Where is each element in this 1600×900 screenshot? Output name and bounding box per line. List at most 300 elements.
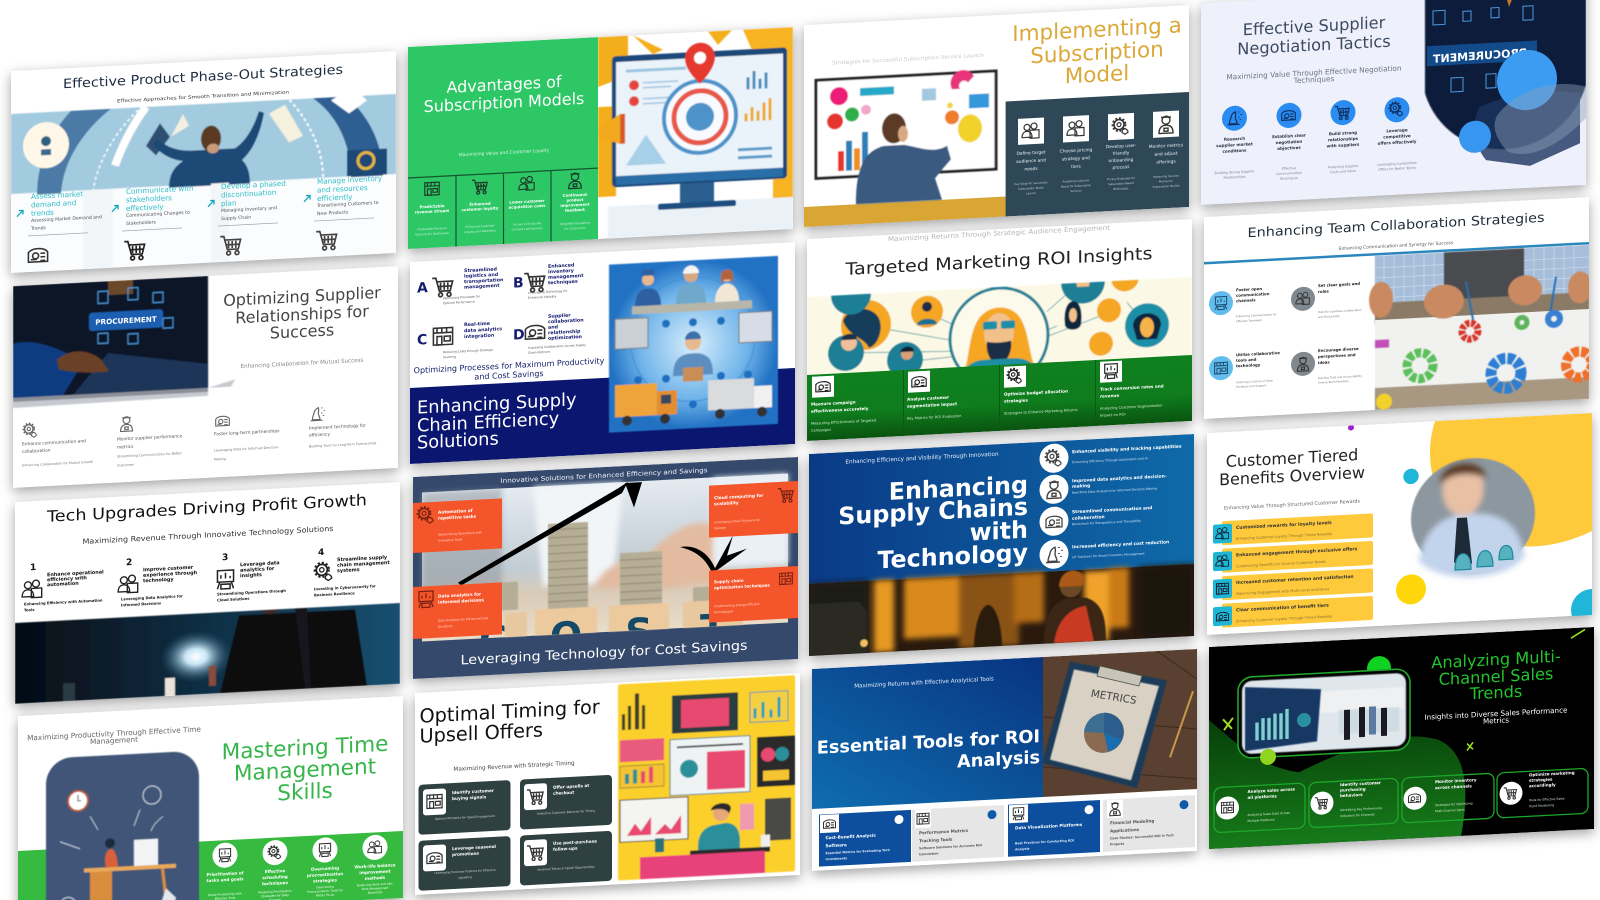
dot: lime bbox=[1260, 749, 1276, 765]
card: seasonal bbox=[418, 836, 510, 891]
tactic: leverage: competitive bbox=[1383, 133, 1411, 140]
card: follow-up: Use post-purchase bbox=[553, 839, 597, 846]
subtitle: Techniques bbox=[1293, 74, 1334, 85]
step: define: Launch bbox=[1026, 191, 1036, 195]
mark: lime x right bbox=[1467, 742, 1473, 751]
title: Tech Upgrades Driving Profit Growth bbox=[46, 491, 367, 526]
card: financial modeling: Applications bbox=[1110, 827, 1140, 834]
card: predictable revenue: revenue stream bbox=[415, 208, 449, 215]
card: cost-benefit: Software bbox=[826, 842, 847, 848]
item C: Sourcing bbox=[443, 355, 456, 359]
illustration: monitor with target bbox=[598, 27, 793, 239]
item: communication: Blockchain for Transparency and Traceability bbox=[1072, 519, 1141, 526]
illustration panel: desk and clocks bbox=[46, 751, 199, 900]
item: develop plan: Managing Inventory and bbox=[221, 205, 277, 214]
card: optimize: Optimize budget allocation bbox=[1004, 388, 1068, 397]
item 1: 1 bbox=[30, 563, 36, 573]
item 2: experience through bbox=[143, 570, 198, 579]
card: product improvement: for Consumers bbox=[564, 226, 586, 231]
step: monitor: offerings bbox=[1156, 159, 1176, 166]
step: define: audience and bbox=[1016, 157, 1046, 165]
card: cost-benefit: Cost-Benefit Analysis bbox=[826, 833, 876, 840]
title: Success bbox=[270, 320, 334, 343]
panel: Customer Tiered Benefits Overview bbox=[1207, 411, 1600, 649]
item: collaborative tools: tools and bbox=[1236, 357, 1257, 363]
card: purchasing behaviors: behaviors bbox=[1340, 792, 1363, 798]
gold band bbox=[804, 196, 1006, 227]
card: supply chain: Supply chain bbox=[714, 578, 744, 584]
step: onboarding: onboarding bbox=[1109, 157, 1134, 164]
card: product improvement: improvement bbox=[560, 202, 590, 208]
card: cloud computing: scalability bbox=[714, 500, 739, 507]
item 2: 2 bbox=[126, 558, 132, 568]
item: work-life bbox=[354, 834, 396, 896]
item: open communication: Effective Teamwork bbox=[1236, 318, 1263, 323]
item: procrastination: Overcoming bbox=[316, 885, 334, 889]
panel: Enhancing Team Collaboration Strategies bbox=[1204, 197, 1592, 419]
dot: teal bbox=[1403, 468, 1419, 484]
card: track: revenue bbox=[1100, 393, 1119, 399]
card: cost-benefit: Investments bbox=[826, 856, 847, 861]
title: Relationships for bbox=[235, 301, 369, 327]
green blob bbox=[1209, 707, 1465, 849]
step: monitor: and adjust bbox=[1154, 151, 1178, 158]
subtitle: Enhancing Value Through Structured Customer Rewards bbox=[1224, 499, 1361, 512]
tactic: relationships: Analyzing Supplier bbox=[1328, 164, 1359, 169]
item: develop plan: Develop a phased bbox=[221, 179, 286, 191]
item: foster: Making bbox=[214, 457, 226, 462]
title: Subscription Models bbox=[424, 89, 584, 116]
item A: Streamlined bbox=[464, 266, 498, 274]
item: monitor: Monitor supplier performance bbox=[117, 433, 182, 443]
tier 4: Enhancing Customer Loyalty Through Tiered Rewards bbox=[1236, 614, 1332, 623]
card: automation: Innovative Tools bbox=[438, 537, 463, 543]
navy band bbox=[410, 368, 795, 464]
card: track bbox=[1100, 358, 1164, 418]
tier 3: Increased customer retention and satisfaction bbox=[1236, 574, 1354, 586]
subtitle: Enhancing Communication and Synergy for Success bbox=[1339, 240, 1454, 252]
subtitle: Effective Approaches for Smooth Transition and Minimization bbox=[117, 90, 289, 104]
item: communicate bbox=[112, 184, 194, 261]
card: automation: Automation of bbox=[438, 508, 473, 516]
step: monitor: Measuring Success bbox=[1153, 173, 1179, 179]
card: analyze: Key Metrics for ROI Evaluation bbox=[907, 414, 961, 421]
card: checkout: Offer upsells at bbox=[553, 783, 589, 790]
tactic: leverage bbox=[1377, 96, 1417, 172]
item: procrastination: Better Focus bbox=[316, 893, 335, 898]
card divider lines bbox=[408, 168, 598, 249]
title: Optimal Timing for bbox=[420, 695, 600, 728]
item: communication: Enhance communication and bbox=[22, 438, 86, 448]
card: customer loyalty: Enhanced Customer bbox=[465, 223, 495, 229]
card: cloud computing bbox=[709, 481, 798, 538]
item: visibility: Enhancing Efficiency Through Automation and AI bbox=[1072, 456, 1148, 464]
item: monitor: Outcomes bbox=[117, 463, 134, 468]
item D: relationship bbox=[548, 329, 581, 336]
card: cloud computing: Cloud computing for bbox=[714, 493, 764, 501]
card: seasonal: Leverage seasonal bbox=[452, 844, 497, 851]
step: pricing: tiers bbox=[1071, 164, 1082, 170]
card: performance metrics: Software Solutions for Accurate ROI bbox=[919, 843, 982, 850]
card: analyze sales: Multiple Platforms bbox=[1248, 818, 1275, 823]
item B: techniques bbox=[548, 279, 578, 286]
item: collaborative tools: Feedback and Support bbox=[1236, 383, 1266, 389]
item: communicate: Communicate with bbox=[126, 184, 194, 196]
mark: lime dash bbox=[1571, 629, 1585, 638]
item: communication: collaboration bbox=[22, 448, 51, 455]
tactic: objectives: Establish clear bbox=[1272, 133, 1306, 139]
card: track: Impact on ROI bbox=[1100, 412, 1126, 418]
item: scheduling: techniques bbox=[262, 880, 289, 886]
card: data analytics bbox=[413, 582, 502, 639]
item D: and bbox=[548, 324, 559, 331]
panel: Mastering Time Management Skills bbox=[18, 696, 403, 900]
card: product improvement: Continuous bbox=[563, 192, 588, 198]
item: scheduling: Mastering Prioritization bbox=[258, 889, 292, 895]
tactic: leverage: Leverage bbox=[1386, 127, 1408, 133]
step: onboarding: Develop user- bbox=[1106, 143, 1137, 150]
card: financial modeling: Financial Modeling bbox=[1110, 818, 1154, 826]
card: acquisition costs: Content and Services bbox=[512, 226, 543, 232]
step: define: needs bbox=[1024, 166, 1038, 173]
dark panel with steps bbox=[1006, 92, 1190, 217]
item: open communication: Foster open bbox=[1236, 286, 1262, 292]
item: communicate: Stakeholders bbox=[126, 219, 156, 227]
card: monitor inventory: Monitor inventory bbox=[1435, 777, 1477, 784]
item: procrastination: procrastination bbox=[307, 871, 343, 878]
panel: Effective Product Phase-Out Strategies bbox=[11, 51, 396, 273]
item 4 bbox=[314, 544, 390, 597]
step: define: Key Steps for Successful bbox=[1015, 180, 1048, 186]
subtitle: Maximizing Value and Customer Loyalty bbox=[459, 148, 549, 158]
step: pricing: Analyzing Customer bbox=[1063, 178, 1090, 184]
subtitle: Enhancing Collaboration for Mutual Success bbox=[241, 358, 364, 370]
card: analyze: segmentation impact bbox=[907, 401, 957, 409]
tactic: research: Research bbox=[1224, 136, 1245, 142]
item C: C bbox=[417, 332, 427, 349]
card: measure: Measure campaign bbox=[811, 399, 856, 407]
card: customer loyalty: Loyalty and Retention bbox=[464, 228, 496, 234]
item: diverse perspectives: Building Trust and Accountability bbox=[1318, 374, 1362, 380]
item 4: Streamline supply bbox=[337, 555, 388, 563]
label: mirrored procurement: PROCUREMENT bbox=[1432, 46, 1527, 66]
illustration: supply chain workers and trucks bbox=[609, 256, 778, 433]
item: communication: collaboration bbox=[1072, 514, 1105, 522]
card: performance metrics bbox=[912, 805, 1004, 862]
item: diverse perspectives: Encourage diverse bbox=[1318, 346, 1359, 353]
title: Mastering Time bbox=[222, 732, 388, 765]
card: purchasing behaviors: purchasing bbox=[1340, 786, 1366, 793]
illustration: man at curved roads bbox=[11, 85, 396, 273]
item: goals and roles bbox=[1291, 281, 1362, 320]
item: procrastination: strategies bbox=[313, 877, 337, 884]
item D: Chain Partners bbox=[528, 350, 550, 355]
subtitle: Management bbox=[90, 735, 138, 746]
card: data analytics: Decisions bbox=[438, 624, 453, 629]
photo: man in circle bbox=[1411, 455, 1535, 580]
card: data visualization: Data Visualization Platforms bbox=[1015, 822, 1083, 830]
card: analyze sales: Analyze sales across bbox=[1248, 786, 1296, 794]
title: Chain Efficiency bbox=[417, 408, 559, 437]
item B: Enhanced bbox=[548, 262, 575, 270]
card: cost-benefit: Essential Metrics for Evaluating Tech bbox=[826, 848, 890, 855]
item 3: Cloud Solutions bbox=[217, 597, 250, 602]
tier 3: Maximizing Engagement with Multi-Level Incentives bbox=[1236, 587, 1330, 596]
item: data analytics: Real-Time Data Analytics for Informed Decision-Making bbox=[1072, 486, 1157, 495]
subtitle: Maximizing Value Through Effective Negotiation bbox=[1226, 64, 1402, 82]
tier 4: Clear communication of benefit tiers bbox=[1236, 603, 1329, 613]
card: purchasing behaviors bbox=[1309, 778, 1398, 828]
panel: Optimizing Supplier Relationships bbox=[13, 266, 398, 488]
card: product improvement bbox=[560, 172, 590, 231]
item: goals and roles: Set clear goals and bbox=[1318, 281, 1360, 288]
title: Solutions bbox=[417, 428, 499, 454]
green footer bbox=[807, 355, 1192, 441]
letters on blocks bbox=[479, 606, 726, 663]
item: work-life: improvement bbox=[359, 869, 391, 875]
item 1: Tools bbox=[24, 608, 35, 613]
item: communication: Enhancing Collaboration for Mutual Growth bbox=[22, 460, 93, 468]
item 1: automation bbox=[47, 581, 79, 588]
card: financial modeling: Case Studies: Successful ROI in Tech bbox=[1110, 833, 1174, 841]
card: measure: effectiveness accurately bbox=[811, 406, 869, 414]
item: collaborative tools: Utilize collaborative bbox=[1236, 350, 1280, 357]
subtitle: Maximizing Productivity Through Effective Time bbox=[27, 724, 201, 743]
item B: Enhanced Visibility bbox=[528, 294, 557, 300]
card: acquisition costs: Lower customer bbox=[509, 198, 545, 205]
title: Upsell Offers bbox=[419, 718, 543, 748]
card: data analytics: Data Analytics for Enhanced Cost bbox=[438, 616, 489, 623]
item: assess market: trends bbox=[31, 208, 54, 218]
card: acquisition costs bbox=[509, 176, 546, 232]
tactic: objectives: Techniques bbox=[1279, 176, 1298, 181]
panel: Targeted Marketing ROI Insights bbox=[807, 219, 1192, 441]
item 4: systems bbox=[337, 567, 360, 574]
item 3: Leverage data bbox=[240, 560, 280, 568]
card: cloud computing: Leveraging Cloud Solutions for bbox=[714, 518, 761, 524]
step: define bbox=[1015, 117, 1048, 196]
card: buying signals: Optimal Moments for Upsell Engagement bbox=[435, 814, 496, 821]
item 2: Leveraging Data Analytics for bbox=[121, 594, 183, 601]
tactic: relationships: Build strong bbox=[1329, 130, 1357, 136]
item 3: analytics for bbox=[240, 566, 275, 574]
item: technology: Implement technology for bbox=[309, 423, 366, 432]
letters on blocks: O bbox=[550, 613, 582, 659]
photo: laptop procurement bbox=[13, 274, 235, 408]
title: Model bbox=[1065, 61, 1129, 89]
card: customer loyalty bbox=[462, 179, 499, 234]
item D bbox=[513, 312, 586, 356]
card: data analytics: Data analytics for bbox=[438, 591, 482, 600]
item: procrastination: Overcoming bbox=[311, 865, 339, 872]
card: buying signals: buying signals bbox=[452, 794, 487, 801]
item: scheduling bbox=[258, 839, 292, 900]
item: monitor bbox=[117, 414, 182, 468]
item 3: 3 bbox=[222, 553, 228, 563]
card: follow-up bbox=[520, 831, 612, 886]
item: collaborative tools: technology bbox=[1236, 362, 1261, 368]
step: onboarding: friendly bbox=[1113, 150, 1130, 157]
card: checkout: checkout bbox=[553, 790, 574, 796]
card: supply chain: optimization techniques bbox=[714, 582, 770, 590]
card: buying signals: Identify customer bbox=[452, 788, 495, 795]
title: Technology bbox=[877, 539, 1028, 574]
tier 2: Enhanced engagement through exclusive offers bbox=[1236, 546, 1358, 558]
letters on blocks: S bbox=[625, 610, 653, 655]
step: onboarding: Businesses bbox=[1114, 186, 1129, 191]
item A bbox=[417, 266, 504, 307]
label: metrics: METRICS bbox=[1090, 688, 1138, 707]
item: visibility: Enhanced visibility and tracking capabilities bbox=[1072, 444, 1182, 455]
step: monitor: Subscription Models bbox=[1152, 183, 1180, 189]
step: define: Define target bbox=[1016, 149, 1046, 157]
card: data visualization: Best Practices for Conducting ROI bbox=[1015, 838, 1074, 845]
card: measure: Measuring Effectiveness of Targeted bbox=[811, 418, 876, 426]
card: predictable revenue: Streams for Businesses bbox=[415, 231, 449, 237]
item C: Reducing Costs through Strategic bbox=[443, 348, 494, 354]
subtitle: Insights into Diverse Sales Performance bbox=[1425, 705, 1568, 722]
item: communicate: stakeholders bbox=[126, 193, 172, 205]
card: automation: Streamlining Operations with bbox=[438, 530, 482, 537]
card: financial modeling: Projects bbox=[1110, 842, 1124, 847]
item 2: technology bbox=[143, 577, 174, 584]
dot: purple bbox=[1348, 424, 1354, 431]
card: follow-up: follow-ups bbox=[553, 846, 578, 852]
item 3 bbox=[217, 550, 286, 602]
item C: integration bbox=[464, 333, 495, 340]
item: technology bbox=[309, 405, 377, 449]
item: assess market bbox=[17, 188, 102, 263]
tier 1: Enhancing Customer Loyalty Through Tiered Rewards bbox=[1236, 532, 1332, 541]
item: diverse perspectives: Among Team Members bbox=[1318, 379, 1349, 385]
step: define: Subscription Model bbox=[1018, 186, 1044, 191]
tactic: research: conditions bbox=[1223, 148, 1247, 154]
item B: management bbox=[548, 273, 584, 281]
label: procurement: PROCUREMENT bbox=[95, 315, 157, 327]
panel: Essential Tools for ROI Analysis bbox=[812, 649, 1197, 871]
item: cost reduction: IoT Solutions for Smart Inventory Management bbox=[1072, 552, 1145, 559]
card: supply chain: Implementing Energy-Efficient bbox=[714, 602, 760, 608]
item A: Optimizing Processes for bbox=[443, 294, 481, 300]
letters on blocks: T bbox=[700, 606, 726, 651]
item: develop plan bbox=[208, 179, 286, 256]
item: data analytics: making bbox=[1072, 483, 1090, 490]
tactic: relationships: relationships bbox=[1328, 136, 1359, 142]
item: manage inventory bbox=[304, 174, 383, 251]
subtitle: Strategies for Successful Subscription Service Launch bbox=[832, 53, 984, 67]
title: Customer Tiered bbox=[1226, 445, 1358, 471]
step: onboarding: Pricing Strategies for bbox=[1107, 176, 1136, 181]
item: monitor: metrics bbox=[117, 444, 134, 451]
card: analyze sales bbox=[1214, 783, 1305, 833]
card: supply chain bbox=[709, 566, 798, 623]
illustration: man at whiteboard bbox=[816, 68, 996, 206]
item: visibility bbox=[1040, 437, 1182, 474]
tier 3 bbox=[1213, 568, 1373, 601]
panel: Enhancing Supply Chain Efficiency Solutions bbox=[410, 242, 795, 464]
title: Effective Product Phase-Out Strategies bbox=[63, 63, 343, 92]
card: optimize marketing: Optimize marketing bbox=[1529, 770, 1575, 777]
item D: D bbox=[513, 327, 525, 344]
letters on blocks: C bbox=[479, 617, 507, 663]
tactic: relationships bbox=[1327, 99, 1360, 174]
item: prioritization: tasks and goals bbox=[207, 876, 244, 883]
item: scheduling: Strategies for Daily bbox=[261, 893, 289, 898]
subtitle: Maximizing Revenue with Strategic Timing bbox=[453, 761, 575, 773]
card: buying signals bbox=[418, 780, 510, 835]
step: pricing bbox=[1060, 115, 1093, 194]
dot: green bbox=[1367, 656, 1391, 681]
tactic: research bbox=[1215, 105, 1255, 180]
title: Skills bbox=[277, 779, 333, 807]
item: procrastination bbox=[307, 837, 344, 898]
title: Leveraging Technology for Cost Savings bbox=[461, 639, 748, 669]
panel: Tech Upgrades Driving Profit Growth bbox=[15, 482, 400, 704]
item C bbox=[417, 320, 502, 361]
tactic: objectives: Communication bbox=[1276, 171, 1302, 176]
card: automation: repetitive tasks bbox=[438, 514, 477, 522]
subtitle: Maximizing Returns with Effective Analytical Tools bbox=[854, 677, 994, 690]
tactic: research: supplier market bbox=[1216, 141, 1253, 148]
title: Analysis bbox=[957, 748, 1040, 772]
card: analyze: Analyze customer bbox=[907, 395, 950, 402]
card: product improvement: feedback bbox=[565, 207, 585, 213]
card: customer loyalty: customer loyalty bbox=[462, 205, 499, 212]
item: assess market: Trends bbox=[30, 225, 47, 232]
item: communicate: Communicating Changes to bbox=[126, 210, 190, 219]
item: manage inventory: efficiently bbox=[317, 192, 353, 203]
item: assess market: demand and bbox=[31, 198, 76, 209]
item 2: Informed Decisions bbox=[121, 601, 162, 607]
step: pricing: Choose pricing bbox=[1060, 147, 1093, 155]
mark: lime x left bbox=[1223, 718, 1233, 730]
item: communicate: effectively bbox=[126, 202, 164, 213]
photo: warehouse fire light bbox=[809, 564, 1194, 656]
step: monitor bbox=[1149, 110, 1184, 189]
item: work-life: methods bbox=[365, 875, 386, 881]
subtitle: Innovative Solutions for Enhanced Efficiency and Savings bbox=[500, 466, 708, 485]
tier 1: Customized rewards for loyalty levels bbox=[1236, 520, 1332, 531]
card: acquisition costs: Access to Exclusive bbox=[513, 221, 541, 227]
item: develop plan: discontinuation bbox=[221, 188, 276, 200]
item: diverse perspectives: ideas bbox=[1318, 359, 1330, 365]
item B: Leveraging Technology for bbox=[528, 289, 568, 295]
card: optimize marketing: accordingly bbox=[1529, 782, 1556, 788]
item: open communication: Enhancing Communication for bbox=[1236, 312, 1278, 318]
subtitle: and Cost Savings bbox=[474, 369, 544, 382]
item: assess market: Assessing Market Demand and bbox=[31, 214, 102, 224]
item: open communication: channels bbox=[1236, 297, 1256, 303]
subtitle: Enhancing Efficiency and Visibility Through Innovation bbox=[845, 452, 999, 466]
item 1 bbox=[22, 559, 104, 613]
item A: management bbox=[464, 283, 500, 291]
card: product improvement: product bbox=[566, 197, 584, 203]
illustration: audience network bbox=[807, 254, 1192, 396]
card: performance metrics: Performance Metrics bbox=[919, 828, 969, 835]
card: optimize marketing: Trend Monitoring bbox=[1528, 803, 1554, 808]
title: Supply Chains bbox=[838, 493, 1028, 530]
card: purchasing behaviors: Identifying Key Performance bbox=[1340, 806, 1382, 812]
card: seasonal: Upselling bbox=[458, 875, 472, 880]
item: collaborative tools: Fostering a Culture of Open bbox=[1236, 378, 1273, 384]
title: Enhancing Supply bbox=[417, 389, 577, 419]
item 4: chain management bbox=[337, 560, 390, 569]
title: Subscription bbox=[1030, 37, 1164, 69]
item: monitor: Streamlining Communication for Better bbox=[117, 451, 182, 459]
card: measure bbox=[811, 373, 876, 433]
yellow blob bbox=[1430, 413, 1592, 552]
item: goals and roles: Tools for Seamless Collaboration bbox=[1317, 308, 1362, 314]
